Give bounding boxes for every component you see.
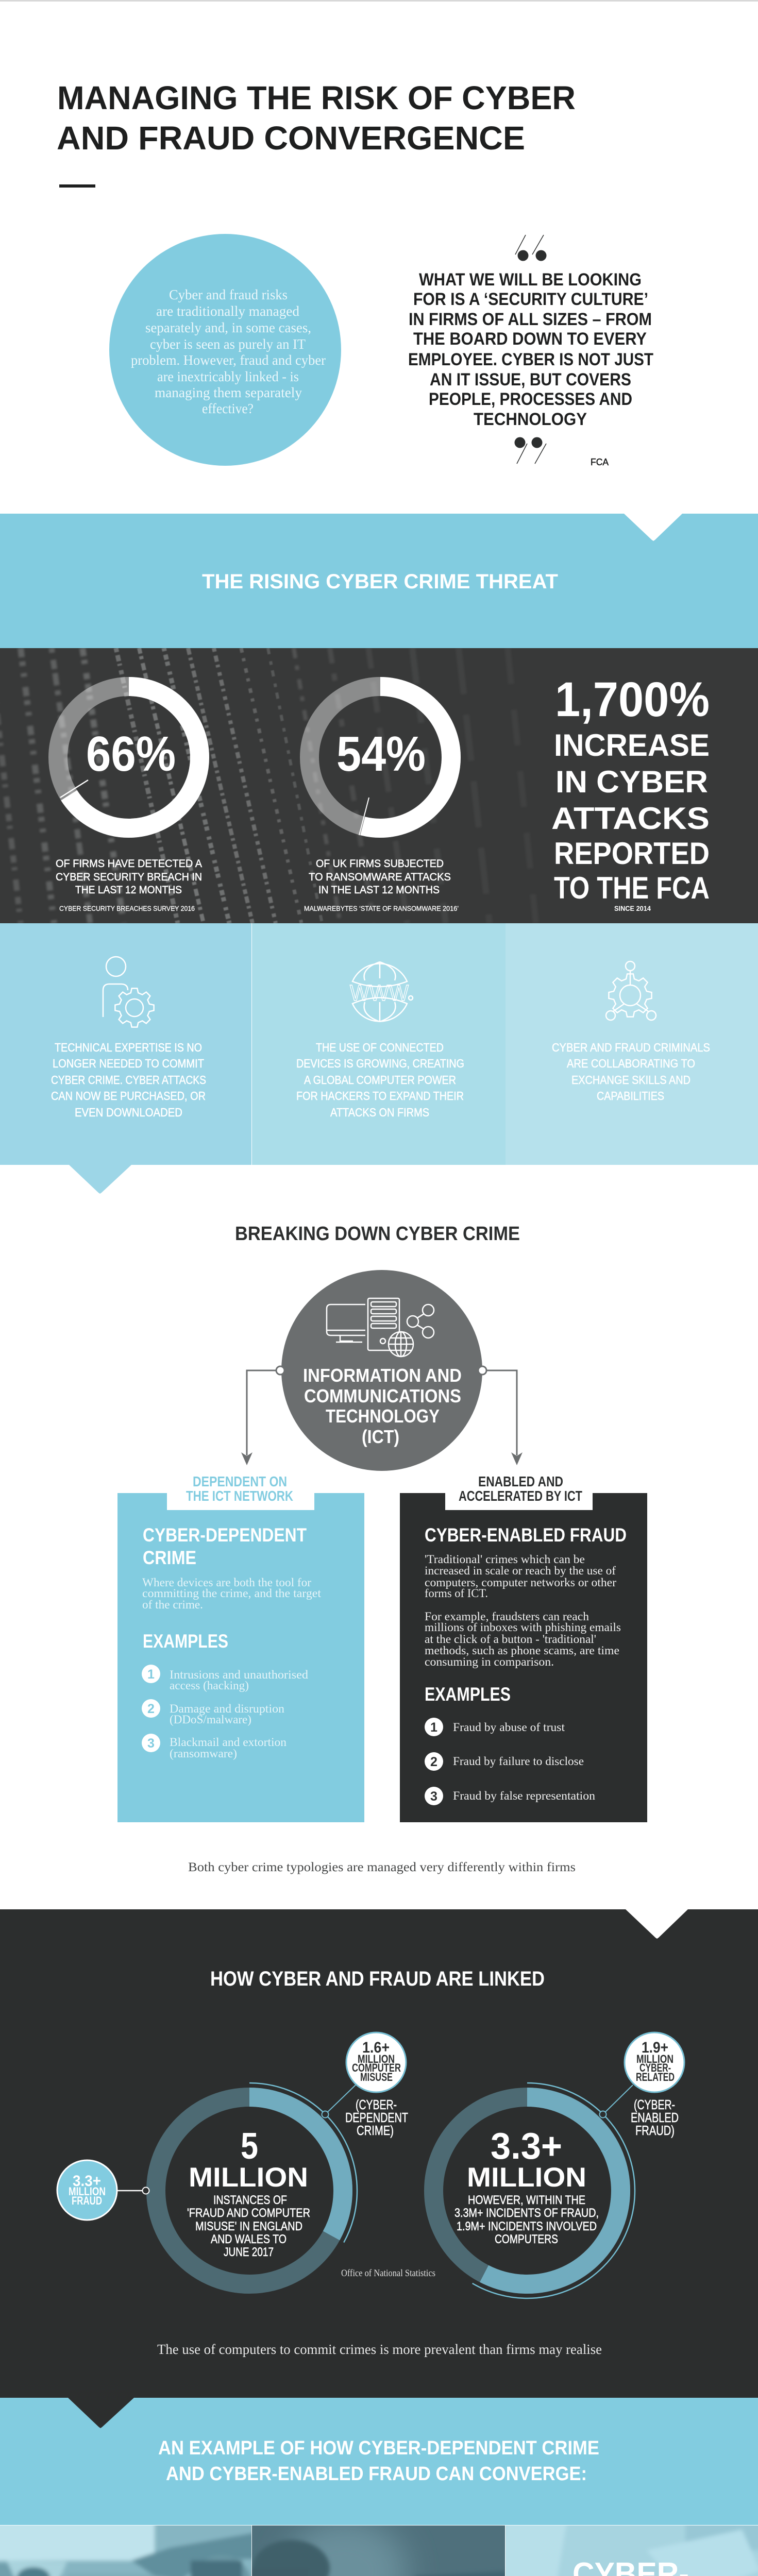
title: MANAGING THE RISK OF CYBER	[57, 79, 576, 116]
stat: 1,700% increase: INCREASE	[554, 728, 710, 762]
panel body: increased in scale or reach by the use of	[425, 1564, 616, 1577]
stat: 1,700% increase	[551, 672, 710, 912]
panel body	[425, 1553, 621, 1668]
donut chart: 5 million: JUNE 2017	[224, 2245, 274, 2259]
section band: rising cyber crime threat	[0, 514, 758, 648]
callout: 3.3+ million fraud	[57, 2160, 149, 2220]
callout: 1.9+ million cyber-related	[600, 2032, 684, 2138]
quote text: FOR IS A ‘SECURITY CULTURE’	[413, 290, 648, 309]
photo background: laptop shopping	[506, 2526, 758, 2576]
panel body: computers, computer networks or other	[425, 1576, 616, 1589]
donut chart: 5 million: AND WALES TO	[211, 2232, 287, 2246]
text: TECHNICAL EXPERTISE IS NO	[55, 1041, 202, 1054]
callout: 1.9+ million cyber-related: (CYBER-	[634, 2097, 675, 2112]
stat caption: ransomware: TO RANSOMWARE ATTACKS	[309, 871, 451, 883]
donut chart: 66%	[58, 686, 200, 828]
panel: connected devices	[252, 923, 506, 1165]
ICT title: (ICT)	[362, 1426, 399, 1447]
text	[552, 1041, 710, 1103]
photo background: office worker	[0, 2526, 251, 2576]
donut chart: 5 million: INSTANCES OF	[213, 2193, 287, 2207]
icon: person with gear	[103, 957, 154, 1027]
stat: 1,700% increase: REPORTED	[554, 836, 710, 871]
panel body: methods, such as phone scams, are time	[425, 1644, 619, 1657]
examples heading: EXAMPLES	[425, 1684, 511, 1705]
photo background: hacker at screen	[252, 2526, 505, 2576]
panel body: consuming in comparison.	[425, 1655, 554, 1668]
callout: 1.6+ million computer misuse: (CYBER-	[356, 2097, 397, 2112]
donut chart: 3.3+ million: HOWEVER, WITHIN THE	[468, 2193, 585, 2207]
ICT title: COMMUNICATIONS	[304, 1385, 461, 1406]
stat caption: ransomware: OF UK FIRMS SUBJECTED	[316, 858, 444, 870]
stat caption: firms detected breach: CYBER SECURITY BREACH IN	[56, 871, 202, 883]
stat caption: ransomware	[304, 858, 459, 912]
quote text: EMPLOYEE. CYBER IS NOT JUST	[408, 350, 653, 369]
quote text: IN FIRMS OF ALL SIZES – FROM	[409, 310, 652, 329]
example list: Damage and disruption	[170, 1702, 285, 1715]
example list: (ransomware)	[170, 1747, 237, 1760]
example list: (DDoS/malware)	[170, 1713, 251, 1726]
callout: 1.9+ million cyber-related: FRAUD)	[635, 2123, 675, 2138]
example list: 2	[147, 1702, 155, 1716]
stat: 1,700% increase: 1,700%	[555, 672, 710, 727]
intro circle: effective?	[202, 401, 254, 416]
source note: Office of National Statistics	[341, 2268, 435, 2279]
text: FOR HACKERS TO EXPAND THEIR	[296, 1089, 464, 1103]
example list: Fraud by failure to disclose	[453, 1755, 584, 1768]
panel label: ACCELERATED BY ICT	[459, 1488, 582, 1504]
donut chart: 3.3+ million: MILLION	[467, 2162, 586, 2193]
panel label: DEPENDENT ON	[193, 1473, 287, 1489]
donut chart: 5 million: 5	[241, 2126, 258, 2167]
panel body: For example, fraudsters can reach	[425, 1610, 589, 1623]
intro circle: Cyber and fraud risks	[169, 287, 288, 302]
donut chart: 66%: 66%	[86, 726, 176, 782]
panel: technical expertise	[0, 923, 251, 1194]
text: ATTACKS ON FIRMS	[330, 1106, 429, 1119]
text: EXCHANGE SKILLS AND	[571, 1073, 690, 1087]
callout: 1.6+ million computer misuse: 1.6+	[362, 2039, 390, 2056]
panel label	[459, 1473, 582, 1504]
panel body: millions of inboxes with phishing emails	[425, 1621, 621, 1634]
caption: typologies: Both cyber crime typologies are managed very differently within firms	[188, 1860, 576, 1874]
example list: access (hacking)	[170, 1679, 249, 1692]
callout: 1.9+ million cyber-related: CYBER-	[639, 2061, 671, 2074]
callout: 3.3+ million fraud: FRAUD	[72, 2194, 102, 2207]
text: LONGER NEEDED TO COMMIT	[53, 1057, 204, 1070]
panel body: of the crime.	[142, 1598, 203, 1611]
callout: 3.3+ million fraud: 3.3+	[73, 2173, 101, 2190]
stat caption: firms detected breach: CYBER SECURITY BREACHES SURVEY 2016	[59, 904, 195, 912]
callout: 1.6+ million computer misuse: COMPUTER	[352, 2061, 401, 2074]
intro circle: cyber is seen as purely an IT	[150, 336, 306, 352]
panel label	[186, 1473, 293, 1504]
intro circle: are traditionally managed	[156, 303, 299, 319]
icon: computer, server and network	[327, 1298, 434, 1357]
stat: 1,700% increase: SINCE 2014	[614, 904, 651, 912]
FCA quote	[408, 235, 653, 467]
panel: cyber-enabled fraud	[400, 1473, 647, 1822]
text: CYBER CRIME. CYBER ATTACKS	[51, 1073, 206, 1087]
panel: cyber attack	[252, 2526, 505, 2576]
callout: 1.6+ million computer misuse: MISUSE	[360, 2071, 393, 2083]
stat: 1,700% increase: TO THE FCA	[554, 871, 710, 905]
intro circle: are inextricably linked - is	[157, 369, 299, 384]
intro circle	[109, 234, 341, 466]
intro circle: problem. However, fraud and cyber	[131, 352, 326, 368]
stat: 1,700% increase: ATTACKS	[551, 801, 710, 836]
ICT circle	[281, 1270, 482, 1471]
stat caption: ransomware: IN THE LAST 12 MONTHS	[318, 884, 440, 896]
callout: 1.6+ million computer misuse: CRIME)	[357, 2123, 394, 2138]
donut chart: 5 million: 'FRAUD AND COMPUTER	[187, 2206, 310, 2220]
text	[296, 1041, 464, 1119]
arrow: ICT to cyber-dependent	[241, 1366, 284, 1465]
example list: 3	[147, 1736, 155, 1751]
quote text: AN IT ISSUE, BUT COVERS	[430, 370, 631, 389]
text: EVEN DOWNLOADED	[75, 1106, 182, 1119]
text: CYBER AND FRAUD CRIMINALS	[552, 1041, 710, 1054]
panel: cyber-enabled fraud example	[506, 2526, 758, 2576]
section band: rising cyber crime threat: THE RISING CYBER CRIME THREAT	[202, 570, 558, 593]
callout: 1.6+ million computer misuse: MILLION	[358, 2053, 395, 2065]
panel: insider fraud	[0, 2526, 251, 2576]
quote attribution: FCA	[591, 457, 609, 467]
ICT title	[303, 1365, 462, 1447]
callout: 1.6+ million computer misuse: DEPENDENT	[345, 2110, 408, 2125]
quote text	[408, 270, 653, 429]
donut chart: 3.3+ million: 3.3M+ INCIDENTS OF FRAUD,	[454, 2206, 599, 2220]
callout: 3.3+ million fraud: MILLION	[69, 2185, 106, 2198]
section band: convergence example	[0, 2398, 758, 2525]
panel heading: CRIME	[143, 1547, 196, 1568]
donut chart: 3.3+ million	[419, 2083, 635, 2298]
callout: 1.9+ million cyber-related: 1.9+	[642, 2039, 668, 2056]
intro circle: separately and, in some cases,	[145, 320, 311, 335]
example list: Intrusions and unauthorised	[170, 1668, 309, 1681]
donut chart: 5 million: MILLION	[189, 2162, 308, 2193]
example list: 2	[430, 1755, 437, 1769]
quote text: TECHNOLOGY	[474, 410, 587, 429]
example list: 1	[147, 1667, 155, 1682]
example list: 3	[430, 1789, 437, 1804]
panel heading: CYBER-DEPENDENT	[143, 1524, 307, 1546]
text	[51, 1041, 206, 1119]
panel body: forms of ICT.	[425, 1587, 488, 1600]
title underline dash	[59, 184, 95, 188]
arrow: ICT to cyber-enabled	[478, 1366, 523, 1465]
quote text: PEOPLE, PROCESSES AND	[429, 389, 632, 409]
title: AND FRAUD CONVERGENCE	[57, 120, 525, 157]
section band: convergence example: AN EXAMPLE OF HOW CYBER-DEPENDENT CRIME	[158, 2437, 599, 2459]
text: DEVICES IS GROWING, CREATING	[296, 1057, 464, 1070]
callout: 1.6+ million computer misuse	[322, 2032, 408, 2138]
text: CAPABILITIES	[597, 1089, 664, 1103]
text: THE USE OF CONNECTED	[316, 1041, 444, 1054]
callout: 1.9+ million cyber-related: ENABLED	[631, 2110, 679, 2125]
donut chart: 5 million	[142, 2083, 357, 2298]
panel label: ENABLED AND	[478, 1473, 563, 1489]
caption: prevalence: The use of computers to commit crimes is more prevalent than firms may realise	[157, 2342, 602, 2357]
donut chart: 3.3+ million: 3.3+	[491, 2126, 562, 2167]
donut chart: 3.3+ million: COMPUTERS	[495, 2232, 558, 2246]
panel body: Where devices are both the tool for	[142, 1576, 311, 1589]
example list: Fraud by false representation	[453, 1789, 596, 1802]
donut chart: 54%: 54%	[336, 726, 426, 782]
ICT title: TECHNOLOGY	[326, 1405, 440, 1427]
icon: opening quote mark	[515, 235, 546, 261]
panel: statistics on code background	[0, 648, 758, 923]
stat caption: firms detected breach	[56, 858, 202, 912]
intro circle: managing them separately	[155, 385, 302, 400]
panel: cyber-dependent crime	[117, 1473, 364, 1822]
callout: 1.9+ million cyber-related: RELATED	[636, 2071, 675, 2083]
icon: gear network	[606, 961, 656, 1020]
icon: closing quote mark	[514, 437, 546, 464]
section band: convergence example: AND CYBER-ENABLED FRAUD CAN CONVERGE:	[166, 2463, 587, 2485]
example list: Blackmail and extortion	[170, 1736, 287, 1749]
examples heading: EXAMPLES	[143, 1631, 228, 1652]
quote text: WHAT WE WILL BE LOOKING	[419, 270, 642, 290]
heading: breaking down cyber crime: BREAKING DOWN CYBER CRIME	[235, 1223, 520, 1245]
stat caption: ransomware: MALWAREBYTES ‘STATE OF RANSOMWARE 2016’	[304, 904, 459, 912]
panel body: 'Traditional' crimes which can be	[425, 1553, 585, 1566]
stat caption: firms detected breach: OF FIRMS HAVE DETECTED A	[56, 858, 202, 870]
text: A GLOBAL COMPUTER POWER	[304, 1073, 456, 1087]
quote text: THE BOARD DOWN TO EVERY	[413, 329, 647, 349]
donut chart: 3.3+ million: 1.9M+ INCIDENTS INVOLVED	[457, 2219, 597, 2233]
donut chart: 5 million: MISUSE' IN ENGLAND	[195, 2219, 302, 2233]
icon: www globe: WWW	[350, 980, 409, 1006]
icon: www globe	[350, 962, 413, 1022]
stat: 1,700% increase: IN CYBER	[555, 765, 708, 799]
example list: Fraud by abuse of trust	[453, 1721, 565, 1734]
ICT title: INFORMATION AND	[303, 1365, 462, 1386]
panel body	[142, 1576, 322, 1611]
panel: how cyber and fraud are linked	[0, 1909, 758, 2398]
example list: 1	[430, 1720, 437, 1735]
heading: HOW CYBER AND FRAUD ARE LINKED	[210, 1968, 545, 1990]
panel heading	[143, 1524, 307, 1568]
donut chart: 54%	[309, 686, 451, 835]
text: ARE COLLABORATING TO	[567, 1057, 695, 1070]
example list	[142, 1665, 309, 1760]
panel label: THE ICT NETWORK	[186, 1488, 293, 1504]
stat caption: firms detected breach: THE LAST 12 MONTHS	[75, 884, 182, 896]
callout: 1.9+ million cyber-related: MILLION	[636, 2053, 673, 2065]
panel: criminals collaborating	[506, 923, 758, 1165]
example list	[425, 1718, 596, 1805]
panel body: at the click of a button - 'traditional'	[425, 1633, 596, 1646]
panel heading: CYBER-ENABLED FRAUD	[425, 1524, 627, 1546]
title	[57, 79, 576, 157]
text: CAN NOW BE PURCHASED, OR	[51, 1089, 206, 1103]
panel body: committing the crime, and the target	[142, 1587, 322, 1600]
